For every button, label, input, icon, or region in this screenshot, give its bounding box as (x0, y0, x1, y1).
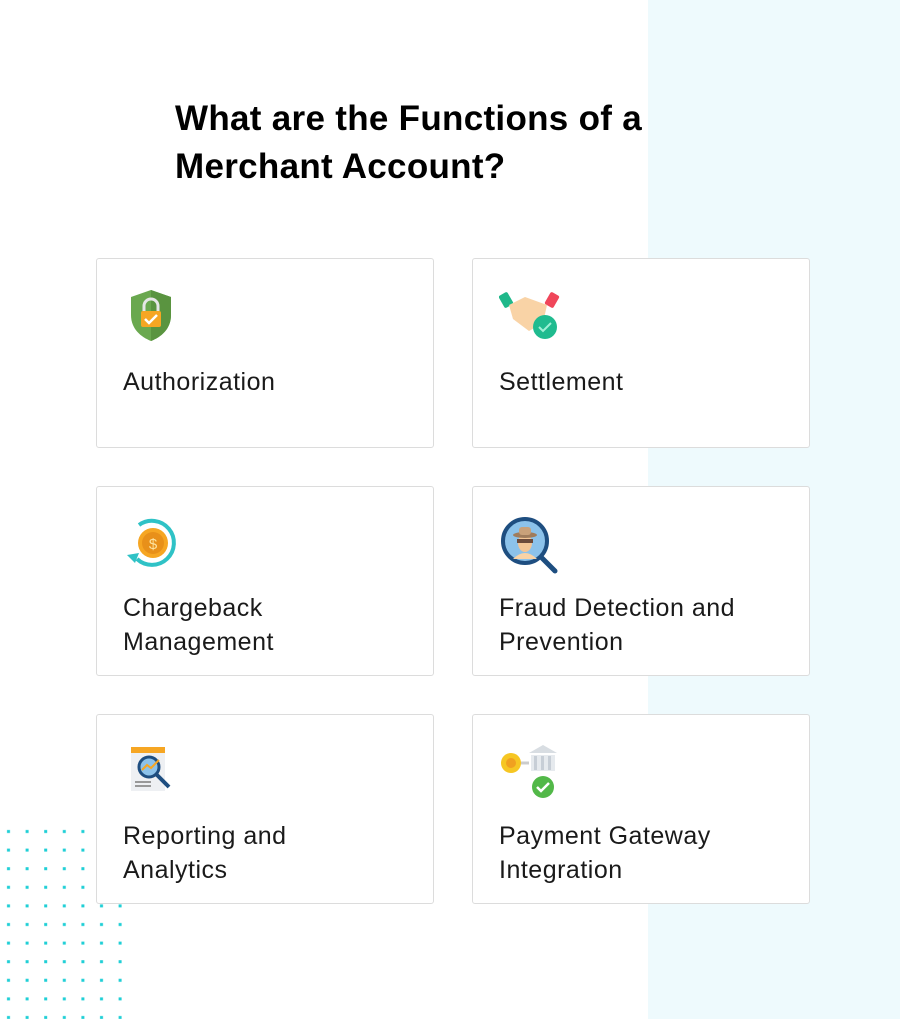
dot pattern (6, 830, 122, 1019)
card: Fraud: Prevention (499, 628, 624, 656)
card: Chargeback (96, 486, 434, 676)
icon: magnifier spy (501, 517, 558, 574)
icon: coin refresh: $ (149, 536, 158, 553)
card: Authorization (96, 258, 434, 448)
icon: shield lock (131, 290, 171, 341)
card: Authorization: Authorization (123, 368, 275, 396)
card: Chargeback: Chargeback (123, 594, 263, 622)
card: Reporting: Analytics (123, 856, 228, 884)
card: Payment gateway (472, 714, 810, 904)
title: Merchant Account? (175, 147, 506, 186)
card: Payment gateway: Integration (499, 856, 623, 884)
card: Chargeback: Management (123, 628, 274, 656)
card: Fraud: Fraud Detection and (499, 594, 735, 622)
card: Fraud (472, 486, 810, 676)
card: Payment gateway: Payment Gateway (499, 822, 711, 850)
card: Settlement (472, 258, 810, 448)
card: Reporting: Reporting and (123, 822, 287, 850)
icon: coin refresh (127, 518, 176, 567)
title: What are the Functions of a (175, 99, 642, 138)
icon: report (131, 747, 170, 791)
title (175, 99, 642, 186)
icon: handshake (499, 292, 560, 339)
icon: gateway (501, 745, 557, 798)
card: Settlement: Settlement (499, 368, 624, 396)
card: Reporting (96, 714, 434, 904)
